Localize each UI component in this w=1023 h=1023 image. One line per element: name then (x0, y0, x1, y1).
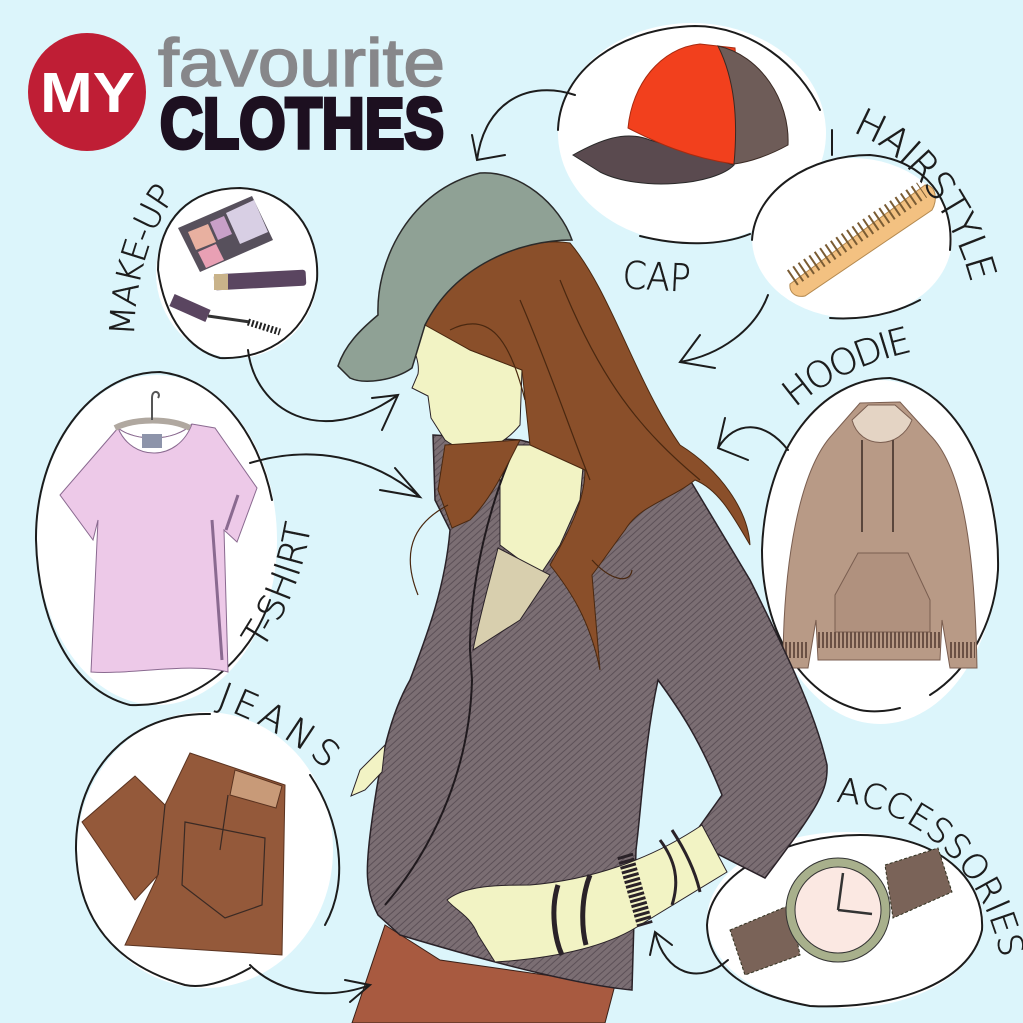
cap (338, 173, 572, 381)
panel: hoodie (761, 326, 1000, 724)
arrow: jeans to trousers (250, 965, 370, 1002)
arrows (248, 90, 788, 1002)
undershirt (473, 548, 550, 650)
forearm and hand (447, 825, 727, 962)
label: jeans: JEANS (214, 682, 340, 766)
arrow: cap to head (472, 90, 575, 160)
arrow: hoodie to body (718, 418, 788, 460)
arrow: comb to hair (680, 295, 768, 368)
logo badge: MY (40, 61, 135, 125)
arrow: make-up to face (248, 350, 398, 430)
panel: t-shirt (35, 371, 310, 706)
arrow: watch to wrist (650, 932, 728, 973)
hair strands (410, 280, 700, 595)
panel: jeans (75, 682, 340, 988)
label: cap: CAP (622, 253, 692, 301)
title: favourite: favourite (158, 25, 445, 101)
figure: girl (338, 173, 827, 1023)
trousers (352, 925, 615, 1023)
icon: comb (790, 185, 935, 296)
hoodie body (367, 435, 827, 990)
hair (425, 242, 750, 670)
title: clothes: CLOTHES (160, 85, 444, 164)
icon: watch (730, 848, 952, 975)
label: hoodie: HOODIE (782, 326, 910, 406)
zipper (385, 440, 518, 905)
panel: hairstyle (751, 108, 998, 320)
icon: mascara (172, 270, 306, 332)
panel: cap (558, 23, 832, 301)
arrow: t-shirt to body (250, 454, 420, 497)
label: make-up: MAKE-UP (108, 184, 168, 331)
label: t-shirt: T-SHIRT (240, 520, 310, 642)
icon: jeans (82, 753, 285, 955)
icon: hoodie (783, 402, 977, 668)
label: hairstyle: HAIRSTYLE (856, 108, 998, 280)
icon: cap (573, 44, 788, 184)
left hand (351, 745, 385, 796)
icon: eyeshadow palette (178, 196, 273, 272)
logo badge (28, 33, 146, 151)
icon: t-shirt (60, 392, 257, 672)
panel: accessories (706, 778, 1023, 1008)
bracelets (554, 830, 700, 955)
neck and top (500, 445, 585, 575)
face (408, 322, 522, 450)
panel: make-up (108, 184, 318, 360)
